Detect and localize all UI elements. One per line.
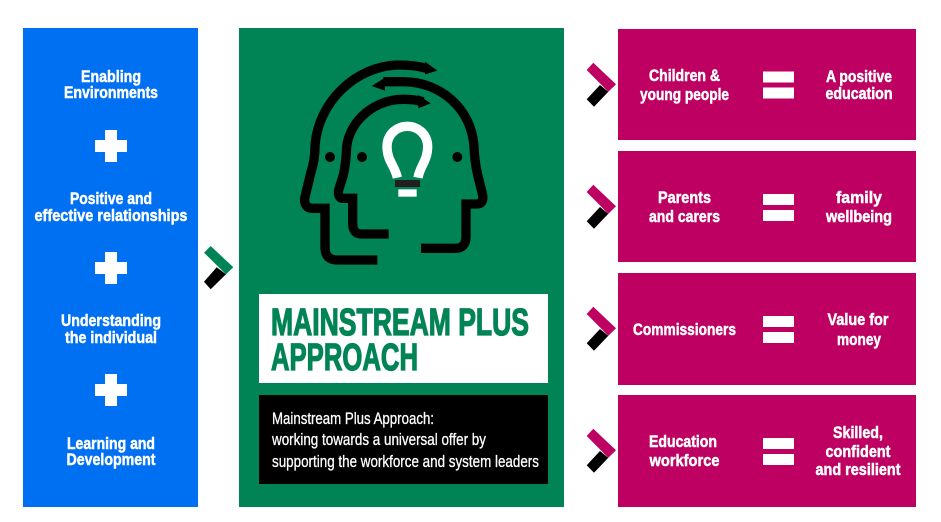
row: commissioners: [587, 273, 916, 385]
row: commissioners: money: [837, 330, 881, 349]
text: Understanding the individual: the individual: [65, 328, 157, 347]
panel 2: [618, 151, 916, 262]
description box: working towards a universal offer by: [271, 430, 486, 449]
row: education workforce: Skilled,: [833, 423, 883, 442]
row: education workforce: [587, 395, 916, 507]
description box: Mainstream Plus Approach:: [272, 409, 434, 428]
row: children and young people: education: [826, 84, 892, 103]
row: education workforce: and resilient: [816, 460, 901, 479]
icon: plus 2: [95, 252, 127, 284]
arrow: blue to green: [204, 246, 233, 289]
text: Learning and Development: Learning and: [67, 434, 155, 453]
panel 3: [618, 273, 916, 385]
text: Learning and Development: [66, 434, 156, 469]
icon: plus 1: [95, 130, 127, 162]
text: Understanding the individual: [61, 311, 161, 347]
description box: supporting the workforce and system leaders: [272, 452, 539, 471]
panel: green approach: [239, 28, 564, 507]
panel 4: [618, 395, 916, 507]
row: education workforce: Education: [649, 432, 717, 451]
heading box: APPROACH: [271, 337, 418, 379]
text: Enabling Environments: Enabling: [81, 67, 141, 86]
row: education workforce: confident: [826, 442, 891, 461]
row: parents and carers: [587, 151, 916, 262]
row: commissioners: Commissioners: [633, 320, 736, 339]
row: commissioners: Value for: [828, 310, 889, 329]
text: Positive and effective relationships: effective relationships: [34, 206, 188, 225]
arrow 4: [587, 429, 616, 473]
text: Learning and Development: Development: [66, 450, 156, 469]
row: children and young people: A positive: [826, 67, 892, 86]
row: parents and carers: and carers: [649, 207, 720, 226]
description box: [259, 395, 548, 484]
text: Enabling Environments: [64, 67, 158, 102]
row: education workforce: workforce: [649, 451, 720, 470]
row: parents and carers: wellbeing: [825, 207, 892, 226]
arrowheads: [372, 62, 437, 108]
panel: blue foundations: [23, 28, 198, 507]
arrow 1: [587, 63, 616, 107]
row: children and young people: young people: [640, 85, 729, 104]
icon: plus 3: [95, 374, 127, 406]
icon: two heads with lightbulb: [305, 62, 483, 260]
panel 1: [618, 29, 916, 140]
row: children and young people: Children &: [649, 66, 720, 85]
text: Positive and effective relationships: [34, 189, 188, 225]
text: Positive and effective relationships: Positive and: [70, 189, 152, 208]
row: children and young people: [587, 29, 916, 140]
text: Enabling Environments: Environments: [64, 83, 158, 102]
row: parents and carers: Parents: [658, 188, 711, 207]
lightbulb: [387, 126, 428, 178]
arrow 2: [587, 185, 616, 229]
heading box: [259, 294, 548, 383]
heading box: MAINSTREAM PLUS: [271, 302, 529, 344]
eyes: [325, 152, 335, 162]
arrow 3: [587, 307, 616, 351]
row: parents and carers: family: [836, 188, 883, 207]
text: Understanding the individual: Understanding: [61, 311, 161, 330]
